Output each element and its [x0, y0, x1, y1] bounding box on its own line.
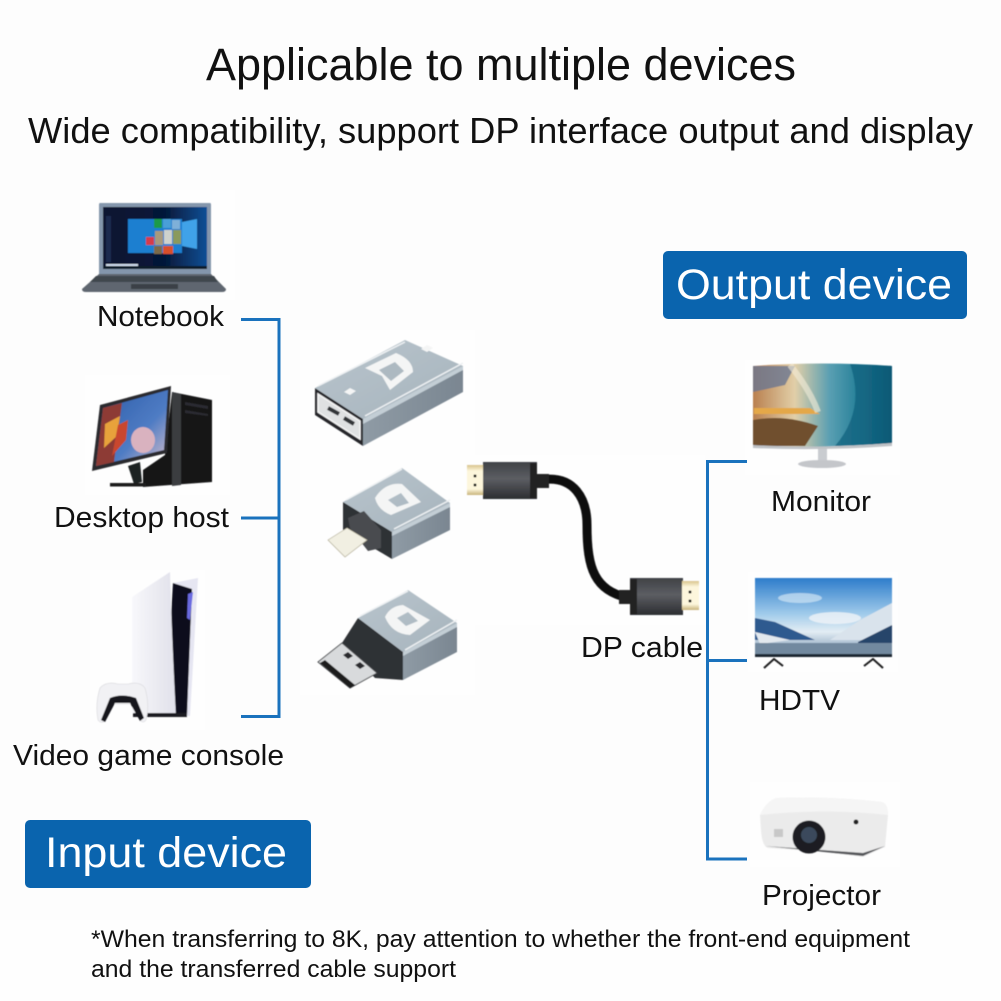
label: notebook: Notebook	[97, 301, 224, 333]
title: Applicable to multiple devices	[206, 39, 796, 90]
icon: notebook	[82, 203, 226, 292]
label: HDTV: HDTV	[759, 685, 841, 717]
footnote: and the transferred cable support	[91, 956, 456, 983]
label: video game console: Video game console	[13, 740, 284, 772]
label: monitor: Monitor	[771, 486, 871, 518]
adapter: DisplayPort female	[315, 340, 463, 446]
badge: output device	[663, 251, 967, 319]
badge: input device: Input device	[45, 829, 287, 877]
bracket: input devices connector	[241, 320, 279, 716]
bracket: output devices connector	[708, 462, 747, 859]
footnote	[91, 926, 910, 983]
adapter: Mini DP	[328, 468, 450, 559]
footnote: *When transferring to 8K, pay attention to whether the front-end equipment	[91, 926, 910, 953]
badge: output device: Output device	[676, 261, 952, 309]
icon: monitor	[753, 364, 892, 468]
icon: DP cable	[467, 462, 699, 615]
label: DP cable: DP cable	[581, 632, 703, 664]
label: projector: Projector	[762, 880, 881, 912]
badge: input device	[25, 820, 311, 888]
icon: desktop host	[92, 386, 212, 487]
icon: HDTV	[755, 578, 892, 668]
label: desktop host: Desktop host	[54, 502, 229, 534]
icon: projector	[760, 798, 888, 857]
subtitle: Wide compatibility, support DP interface output and display	[28, 110, 973, 151]
adapter: DisplayPort male	[318, 590, 457, 688]
icon: video game console	[97, 572, 198, 722]
